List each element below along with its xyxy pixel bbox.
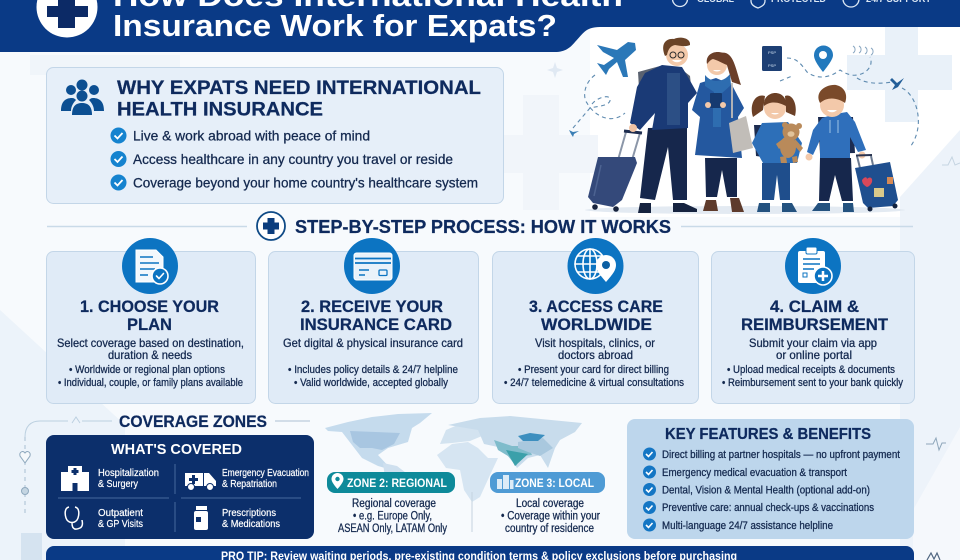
- title: Insurance Work for Expats?: [113, 8, 557, 43]
- icon: buildings: [497, 475, 514, 489]
- panel: step 3 access care worldwide: Visit hospitals, clinics, or: [535, 336, 655, 350]
- heading: HEALTH INSURANCE: [117, 98, 323, 120]
- icon: small plane: [569, 130, 579, 137]
- panel: step 3 access care worldwide: 3. ACCESS CARE: [529, 298, 663, 316]
- panel: step 4 claim and reimbursement: 4. CLAIM &: [770, 298, 859, 316]
- bullet list: Access healthcare in any country you travel or reside: [133, 151, 453, 167]
- panel: what's covered: WHAT'S COVERED: [111, 441, 242, 458]
- panel: key features and benefits: Dental, Vision & Mental Health (optional add-on): [662, 484, 870, 496]
- panel: step 2 receive your insurance card: [268, 238, 478, 404]
- header badges: [672, 0, 932, 8]
- girl: [752, 93, 803, 212]
- panel: step 4 claim and reimbursement: REIMBURSEMENT: [741, 316, 888, 334]
- panel: what's covered: & Surgery: [98, 479, 138, 490]
- panel: step 4 claim and reimbursement: Submit your claim via app: [749, 336, 877, 350]
- zone 3 local: Local coverage: [516, 498, 584, 510]
- bullet list: Coverage beyond your home country's healthcare system: [133, 174, 478, 190]
- panel: what's covered: & Medications: [222, 519, 280, 530]
- panel: what's covered: Outpatient: [98, 508, 143, 519]
- panel: step 3 access care worldwide: doctors abroad: [558, 348, 633, 362]
- panel: what's covered: Prescriptions: [222, 508, 276, 519]
- panel: key features and benefits: Preventive care: annual check-ups & vaccinations: [662, 502, 874, 514]
- panel: what's covered: & Repatriation: [222, 479, 277, 490]
- icon: map pin: [814, 46, 833, 72]
- bullet list: [110, 128, 478, 190]
- man: [629, 38, 697, 213]
- step section heading: STEP-BY-STEP PROCESS: HOW IT WORKS: [295, 217, 671, 237]
- header banner: [0, 0, 960, 52]
- icon: document with check: [122, 238, 178, 294]
- panel: step 2 receive your insurance card: Get digital & physical insurance card: [283, 336, 463, 350]
- check icons: [643, 448, 656, 532]
- world map: [325, 413, 582, 502]
- boy: [806, 85, 866, 212]
- icon: airplane: [597, 42, 636, 77]
- panel: step 1 choose your plan: PLAN: [127, 316, 172, 334]
- icon: medicine bottle: [194, 506, 208, 530]
- panel: what's covered: Emergency Evacuation: [222, 468, 309, 479]
- panel: step 1 choose your plan: • Worldwide or regional plan options: [69, 364, 225, 376]
- panel: key features and benefits: KEY FEATURES & BENEFITS: [665, 426, 871, 443]
- icon: ambulance: [185, 473, 216, 490]
- panel: step 2 receive your insurance card: • Valid worldwide, accepted globally: [294, 377, 448, 389]
- icon: clipboard with plus: [785, 238, 841, 294]
- illustration: expat family with luggage: [569, 38, 918, 214]
- panel: step 1 choose your plan: 1. CHOOSE YOUR: [80, 298, 219, 316]
- panel: step 1 choose your plan: • Individual, couple, or family plans available: [58, 377, 243, 389]
- bullet list: Live & work abroad with peace of mind: [133, 128, 370, 144]
- panel: key features and benefits: [627, 419, 914, 539]
- icon: cross badge: [257, 212, 285, 240]
- panel: step 2 receive your insurance card: • Includes policy details & 24/7 helpline: [288, 364, 458, 376]
- zone 3 local: ZONE 3: LOCAL: [515, 478, 594, 490]
- panel: what's covered: Hospitalization: [98, 468, 159, 479]
- coverage zones heading: COVERAGE ZONES: [119, 412, 267, 431]
- woman: [692, 52, 753, 212]
- step section heading: [47, 212, 913, 240]
- icon: location pin: [332, 473, 344, 489]
- panel: what's covered: [46, 435, 314, 539]
- panel: step 4 claim and reimbursement: or online portal: [776, 348, 852, 362]
- panel: why expats need insurance: [46, 68, 504, 204]
- zone 3 local: [490, 472, 605, 535]
- icon: bottom right pulse mark: [927, 553, 940, 560]
- zone 2 regional: [327, 472, 455, 535]
- panel: step 3 access care worldwide: [492, 238, 698, 404]
- panel: step 2 receive your insurance card: 2. RECEIVE YOUR: [301, 298, 443, 316]
- zone 2 regional: ZONE 2: REGIONAL: [347, 478, 447, 490]
- heading: [117, 77, 481, 120]
- right suitcase: [855, 155, 898, 212]
- icon: medical cross badge: [36, 0, 98, 38]
- heading: WHY EXPATS NEED INTERNATIONAL: [117, 77, 481, 99]
- zone 2 regional: • e.g. Europe Only,: [353, 510, 432, 522]
- panel: step 3 access care worldwide: • 24/7 telemedicine & virtual consultations: [504, 377, 684, 389]
- icon: globe with pin: [568, 238, 624, 294]
- panel: step 4 claim and reimbursement: [712, 238, 914, 404]
- left suitcase: [588, 131, 642, 212]
- icon: small airplane: [890, 78, 904, 90]
- icon: group of people: [61, 80, 104, 115]
- panel: step 3 access care worldwide: • Present your card for direct billing: [518, 364, 669, 376]
- icon: hospital: [61, 466, 89, 491]
- panel: key features and benefits: Emergency medical evacuation & transport: [662, 467, 847, 479]
- zone 3 local: country of residence: [505, 523, 594, 535]
- zone 3 local: • Coverage within your: [501, 510, 600, 522]
- teddy bear: [776, 122, 803, 163]
- icon: passport: [762, 46, 782, 71]
- title: [113, 0, 623, 43]
- panel: key features and benefits: Direct billing at partner hospitals — no upfront payment: [662, 449, 900, 461]
- panel: key features and benefits: Multi-language 24/7 assistance helpline: [662, 520, 833, 532]
- panel: step 4 claim and reimbursement: • Reimbursement sent to your bank quickly: [722, 377, 903, 389]
- panel: step 3 access care worldwide: WORLDWIDE: [541, 316, 652, 334]
- decorative dashed path with heart and globe: [20, 417, 112, 513]
- icon: insurance card: [344, 238, 400, 294]
- icon: heartbeat line: [926, 438, 946, 450]
- icon: passport: PSP: [768, 50, 776, 55]
- zone 2 regional: Regional coverage: [352, 498, 436, 510]
- icon: passport: PSP: [768, 63, 776, 68]
- zone 2 regional: ASEAN Only, LATAM Only: [338, 523, 447, 535]
- pro tip banner: [46, 546, 914, 560]
- panel: step 1 choose your plan: [46, 238, 256, 404]
- panel: step 1 choose your plan: Select coverage based on destination,: [57, 336, 244, 350]
- panel: step 1 choose your plan: duration & needs: [108, 348, 192, 362]
- panel: step 2 receive your insurance card: INSURANCE CARD: [300, 316, 452, 334]
- panel: what's covered: & GP Visits: [98, 519, 143, 530]
- icon: stethoscope: [65, 507, 82, 529]
- panel: step 4 claim and reimbursement: • Upload medical receipts & documents: [727, 364, 895, 376]
